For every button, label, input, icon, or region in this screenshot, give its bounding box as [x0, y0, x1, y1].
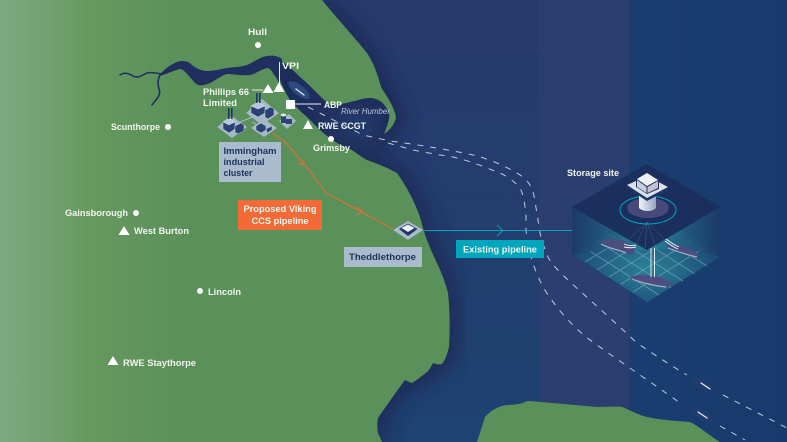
land: mainland: [0, 0, 450, 442]
location: Grimsby: Grimsby: [313, 143, 351, 153]
location: Phillips 66 Limited: Phillips 66: [203, 87, 249, 97]
existing pipeline route: [423, 222, 629, 236]
storage reservoir right: [665, 245, 698, 257]
factory west: [217, 108, 247, 138]
location: VPI: VPI: [282, 61, 299, 71]
label: Storage site: Storage site: [567, 168, 619, 178]
label: Existing pipeline: Existing pipeline: [463, 244, 537, 254]
location: Phillips 66 Limited: Limited: [203, 98, 237, 108]
storage block base: [572, 164, 720, 302]
block top face: [572, 164, 720, 250]
seal ring and platform base: [620, 196, 676, 224]
injection fan lines: [625, 222, 668, 248]
label: Immingham industrial cluster: industrial: [224, 157, 264, 167]
factory south: [251, 119, 277, 137]
label: Theddlethorpe: [344, 247, 422, 267]
sea background: [300, 0, 787, 442]
location: ABP: ABP: [324, 100, 342, 110]
cluster connector lines: [240, 116, 258, 125]
River Humber and its upper channel: [120, 56, 282, 105]
location: Scunthorpe: Scunthorpe: [111, 122, 160, 132]
land: southern shore: [477, 401, 720, 442]
storage reservoir bottom: [630, 275, 675, 287]
icon: ship in estuary: [286, 78, 312, 102]
label: Theddlethorpe: Theddlethorpe: [349, 252, 416, 262]
location: RWE Staythorpe: [108, 356, 196, 368]
label: Immingham industrial cluster: Immingham: [224, 146, 276, 156]
offshore platform: [627, 172, 668, 201]
location: RWE Staythorpe: RWE Staythorpe: [123, 358, 196, 368]
label: River Humber: River Humber: [341, 107, 390, 116]
location: Gainsborough: Gainsborough: [65, 208, 128, 218]
side walls: [572, 207, 647, 255]
shipping lanes: [308, 107, 787, 440]
label: Immingham industrial cluster: [219, 142, 281, 182]
location: Hull: Hull: [248, 27, 267, 37]
storage tanks: [279, 114, 296, 129]
factory north: [246, 93, 279, 125]
icon: ship offshore upper: [692, 375, 716, 395]
reservoir highlights: [601, 244, 697, 287]
location: VPI: [274, 61, 299, 92]
location: West Burton: West Burton: [134, 226, 189, 236]
location: RWE CCGT: RWE CCGT: [318, 121, 366, 131]
proposed Viking CCS pipeline route: [272, 133, 393, 229]
well column: [639, 195, 656, 211]
icon: ship offshore lower: [690, 405, 714, 425]
label: Existing pipeline: [456, 240, 544, 258]
storage site diagram: [572, 164, 720, 302]
label: Proposed Viking CCS pipeline: [238, 200, 322, 230]
location: RWE CCGT: [303, 120, 366, 131]
storage reservoir left: [600, 239, 635, 254]
label: Immingham industrial cluster: cluster: [224, 168, 253, 178]
location: Phillips 66 Limited: [203, 84, 274, 108]
coastal shadow in the sea: [280, 0, 450, 442]
seabed grid floor: [573, 212, 720, 302]
icon: Theddlethorpe terminal: [393, 221, 423, 240]
label: Proposed Viking CCS pipeline: CCS pipeline: [252, 216, 308, 226]
label: Proposed Viking CCS pipeline: Proposed Viking: [244, 204, 316, 214]
location: Lincoln: Lincoln: [208, 287, 241, 297]
location: Grimsby: [313, 136, 351, 153]
location: ABP: [286, 100, 342, 110]
location: Hull: [248, 27, 267, 48]
white injection wells: [624, 239, 679, 277]
industrial cluster icons: [217, 93, 296, 138]
